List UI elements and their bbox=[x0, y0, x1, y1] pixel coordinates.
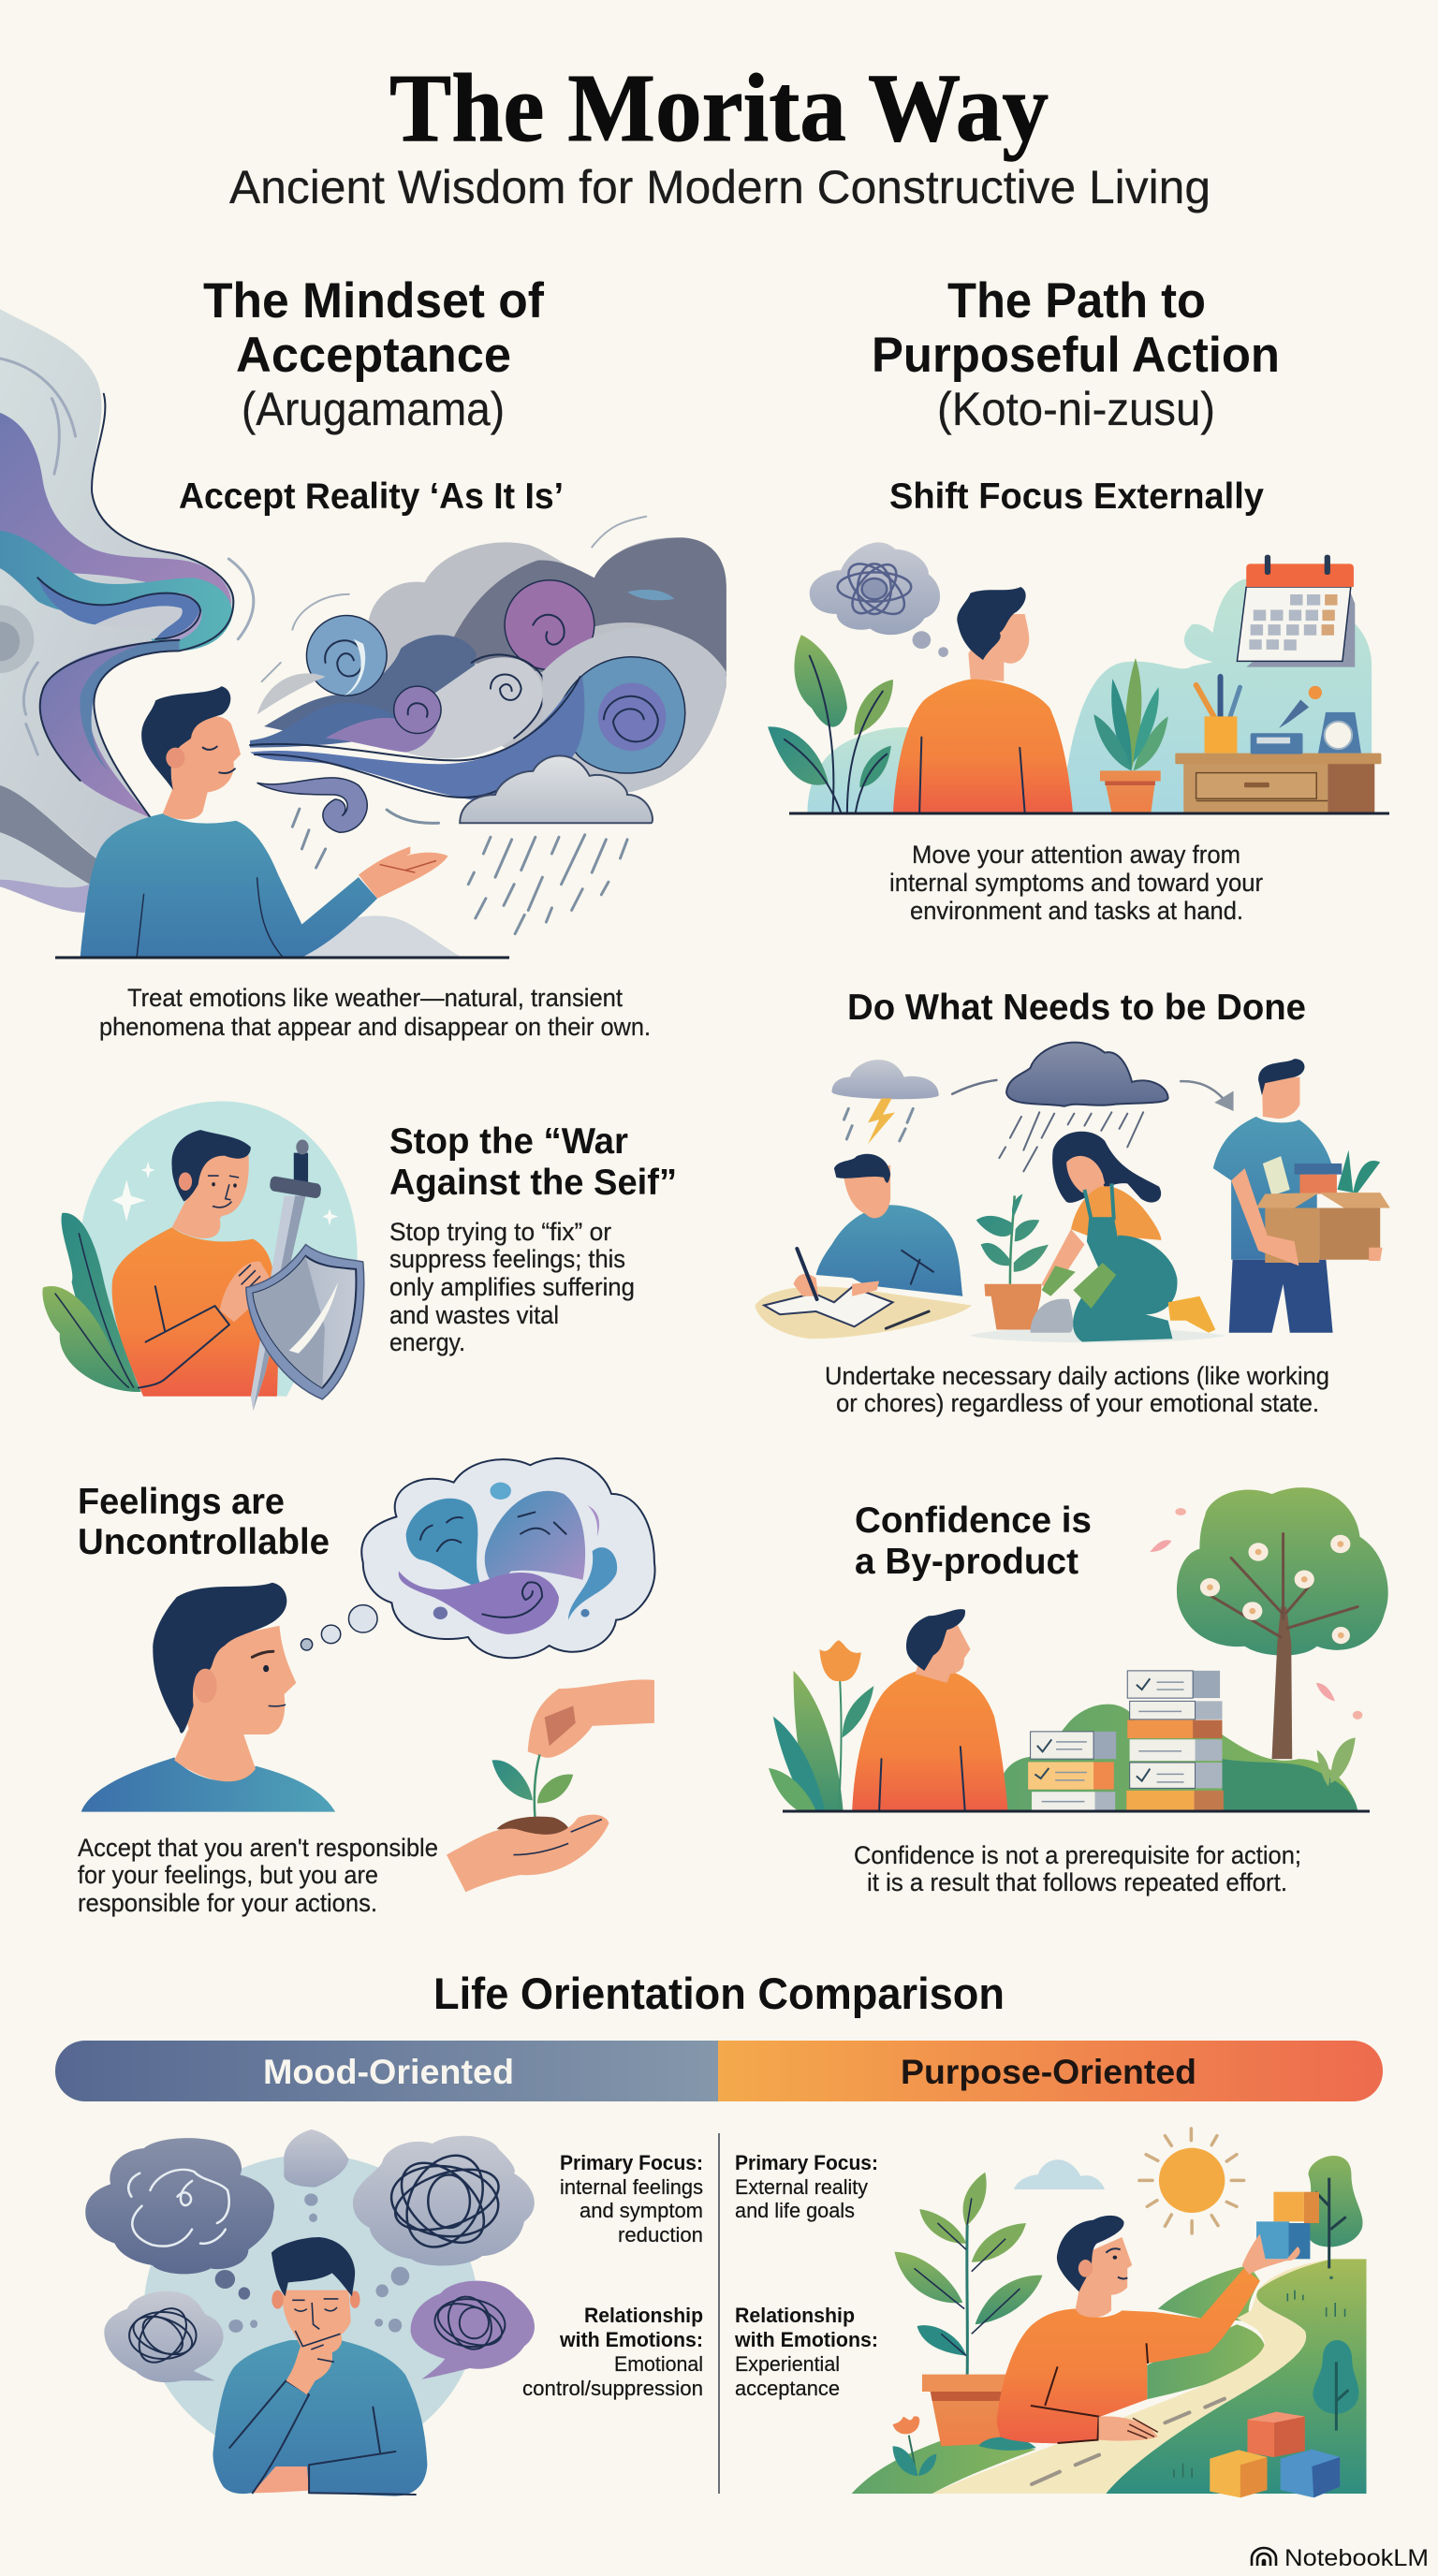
relationship purpose: with Emotions: bbox=[734, 2328, 878, 2351]
tree lower bbox=[1313, 2340, 1358, 2431]
thought cloud bbox=[361, 1458, 655, 1658]
small cloud top bbox=[284, 2130, 348, 2188]
sparkles bbox=[112, 1162, 338, 1225]
column heading: The Mindset of Acceptance: Acceptance bbox=[236, 328, 511, 383]
sun bbox=[1139, 2129, 1244, 2233]
primary focus purpose: External reality bbox=[735, 2175, 868, 2199]
rain cloud bbox=[999, 1043, 1168, 1171]
primary focus mood: reduction bbox=[618, 2223, 703, 2247]
man sitting bbox=[852, 1609, 1007, 1810]
small sprout bbox=[1317, 1737, 1356, 1786]
leaves bbox=[42, 1213, 141, 1392]
text: treat emotions: phenomena that appear and disappear on their own. bbox=[99, 1013, 651, 1041]
primary focus mood: and symptom bbox=[580, 2199, 703, 2222]
text: confidence: Confidence is not a prerequisite for action; bbox=[854, 1841, 1301, 1869]
column heading: The Mindset of Acceptance: The Mindset of bbox=[203, 273, 544, 329]
text: undertake: or chores) regardless of your emotional state. bbox=[836, 1389, 1319, 1417]
flower bbox=[893, 2416, 936, 2476]
text: mood-oriented details bbox=[522, 2151, 703, 2400]
comparison header bar: Purpose-Oriented bbox=[901, 2053, 1196, 2091]
small blue cloud bbox=[1014, 2159, 1105, 2189]
knot cloud lower left bbox=[104, 2291, 224, 2382]
low hill bbox=[301, 915, 462, 958]
hills and path bbox=[852, 2259, 1367, 2494]
column heading: The Path to Purposeful Action: Purposeful Action bbox=[872, 328, 1280, 383]
illustration: feelings uncontrollable bbox=[81, 1458, 655, 1892]
text: undertake: Undertake necessary daily actions (like working bbox=[825, 1362, 1329, 1390]
thought cloud bbox=[810, 542, 948, 657]
heading: Accept Reality: Accept Reality ‘As It Is’ bbox=[179, 476, 564, 517]
column heading: The Path to Purposeful Action: (Koto-ni-zusu) bbox=[937, 383, 1215, 435]
text: purpose-oriented details bbox=[734, 2151, 878, 2400]
dark thought cloud bbox=[85, 2138, 274, 2274]
arrow bbox=[1181, 1081, 1234, 1111]
heading: Do What Needs to be Done: Do What Needs to be Done bbox=[847, 988, 1306, 1028]
woman gardening bbox=[970, 1132, 1226, 1342]
shield bbox=[246, 1245, 364, 1399]
ground line bbox=[783, 1810, 1370, 1812]
man writing bbox=[756, 1154, 972, 1339]
column heading: The Mindset of Acceptance bbox=[203, 273, 544, 435]
hands and seedling bbox=[447, 1679, 654, 1892]
primary focus purpose bbox=[735, 2151, 878, 2222]
relationship purpose: acceptance bbox=[735, 2377, 840, 2400]
primary focus purpose: and life goals bbox=[735, 2199, 855, 2222]
blocks held bbox=[1256, 2192, 1319, 2259]
heading: Confidence: Confidence is bbox=[855, 1500, 1092, 1541]
books right stack bbox=[1126, 1671, 1224, 1811]
storm cloud swirl bbox=[250, 517, 726, 802]
flower plant bbox=[769, 1640, 873, 1810]
heading: feelings bbox=[78, 1482, 330, 1562]
relationship mood: with Emotions: bbox=[559, 2328, 703, 2351]
text: treat emotions bbox=[99, 984, 651, 1041]
man carrying box bbox=[1213, 1059, 1390, 1333]
relationship mood: Relationship bbox=[584, 2304, 703, 2327]
potted plant bbox=[1093, 658, 1168, 812]
teal backdrop bbox=[807, 578, 1372, 812]
logo: NotebookLM: NotebookLM bbox=[1284, 2545, 1429, 2571]
text: move attention bbox=[889, 841, 1263, 925]
primary focus mood: Primary Focus: bbox=[560, 2151, 703, 2174]
storm cloud and bolt bbox=[831, 1060, 939, 1144]
calendar bbox=[1237, 555, 1355, 667]
tree bbox=[1150, 1487, 1388, 1759]
rain bbox=[292, 809, 627, 934]
comparison header bar: Mood-Oriented bbox=[263, 2053, 514, 2091]
title: The Morita Way bbox=[389, 54, 1049, 162]
text: move attention: environment and tasks at hand. bbox=[910, 897, 1243, 925]
heading: stop the war: Stop the “War bbox=[389, 1121, 628, 1162]
knot cloud right bbox=[353, 2136, 535, 2265]
text: stop trying: only amplifies suffering bbox=[389, 1273, 635, 1301]
illustration: man watching emotional weather bbox=[0, 309, 726, 958]
small wind swirl bbox=[257, 778, 367, 832]
column heading: The Mindset of Acceptance: (Arugamama) bbox=[242, 383, 505, 435]
column heading: The Path to Purposeful Action: The Path to bbox=[947, 273, 1206, 329]
man head and shoulders bbox=[81, 1583, 335, 1812]
heading: stop the war: Against the Seif” bbox=[389, 1163, 677, 1203]
illustration: purpose-oriented man on path bbox=[852, 2129, 1367, 2497]
illustration: do what needs to be done bbox=[756, 1043, 1390, 1342]
heading: Shift Focus: Shift Focus Externally bbox=[889, 476, 1264, 517]
column heading: The Path to Purposeful Action bbox=[872, 273, 1280, 435]
illustration: sword and shield man bbox=[42, 1102, 364, 1411]
tree upper bbox=[1308, 2156, 1363, 2279]
heading: life orientation comparison: Life Orientation Comparison bbox=[433, 1969, 1005, 2018]
text: accept responsibility bbox=[78, 1834, 438, 1917]
heading: stop the war bbox=[389, 1121, 677, 1203]
ground blocks bbox=[1210, 2412, 1340, 2497]
text: treat emotions: Treat emotions like weather—natural, transient bbox=[127, 984, 623, 1012]
knot cloud purple bbox=[411, 2281, 535, 2379]
heading: Confidence bbox=[855, 1500, 1092, 1582]
ground line bbox=[789, 812, 1389, 814]
small rain cloud bbox=[460, 755, 653, 823]
plants left bbox=[768, 635, 893, 812]
text: stop trying: energy. bbox=[389, 1328, 465, 1356]
heading: feelings: Uncontrollable bbox=[78, 1522, 330, 1562]
divider bbox=[718, 2133, 720, 2494]
torso bbox=[112, 1130, 278, 1397]
thought dots bbox=[215, 2193, 409, 2333]
plant bbox=[894, 2173, 1043, 2446]
text: stop trying: Stop trying to “fix” or bbox=[389, 1218, 611, 1246]
heading: Confidence: a By-product bbox=[855, 1542, 1078, 1582]
text: accept responsibility: for your feelings, but you are bbox=[78, 1861, 378, 1889]
comparison header bar bbox=[55, 2041, 1383, 2101]
thought bubbles bbox=[301, 1605, 377, 1650]
man with open hand bbox=[81, 686, 448, 958]
man reaching bbox=[978, 2216, 1300, 2451]
relationship purpose: Experiential bbox=[735, 2352, 840, 2376]
logo icon bbox=[1252, 2548, 1276, 2566]
text: confidence bbox=[854, 1841, 1301, 1896]
desk objects bbox=[1196, 677, 1361, 754]
thinking man bbox=[213, 2237, 427, 2496]
relationship mood bbox=[522, 2304, 703, 2400]
primary focus purpose: Primary Focus: bbox=[735, 2151, 878, 2174]
text: confidence: it is a result that follows repeated effort. bbox=[867, 1868, 1287, 1896]
relationship purpose: Relationship bbox=[735, 2304, 855, 2327]
illustration: shift focus externally bbox=[768, 542, 1381, 812]
desk bbox=[1175, 754, 1381, 812]
text: move attention: Move your attention away from bbox=[912, 841, 1240, 869]
primary focus mood bbox=[560, 2151, 703, 2247]
hedge bbox=[996, 1705, 1357, 1810]
text: stop trying bbox=[389, 1218, 635, 1356]
books left stack bbox=[1028, 1732, 1116, 1811]
heading: feelings: Feelings are bbox=[78, 1482, 285, 1522]
text: stop trying: and wastes vital bbox=[389, 1301, 559, 1329]
ground line bbox=[55, 957, 509, 959]
text: accept responsibility: Accept that you aren't responsible bbox=[78, 1834, 438, 1862]
illustration: confidence by-product bbox=[769, 1487, 1388, 1811]
text: stop trying: suppress feelings; this bbox=[389, 1245, 625, 1273]
arrow bbox=[952, 1080, 996, 1094]
subtitle: Ancient Wisdom for Modern Constructive Living bbox=[229, 161, 1211, 213]
swirling waves left bbox=[0, 309, 254, 913]
sword bbox=[251, 1140, 322, 1411]
man from behind bbox=[893, 587, 1073, 812]
primary focus mood: internal feelings bbox=[560, 2175, 703, 2199]
text: undertake bbox=[825, 1362, 1329, 1417]
relationship purpose bbox=[734, 2304, 878, 2400]
relationship mood: Emotional bbox=[614, 2352, 703, 2376]
text: move attention: internal symptoms and toward your bbox=[889, 869, 1263, 897]
relationship mood: control/suppression bbox=[522, 2377, 703, 2400]
illustration: mood-oriented man bbox=[85, 2130, 535, 2496]
text: accept responsibility: responsible for your actions. bbox=[78, 1889, 377, 1917]
